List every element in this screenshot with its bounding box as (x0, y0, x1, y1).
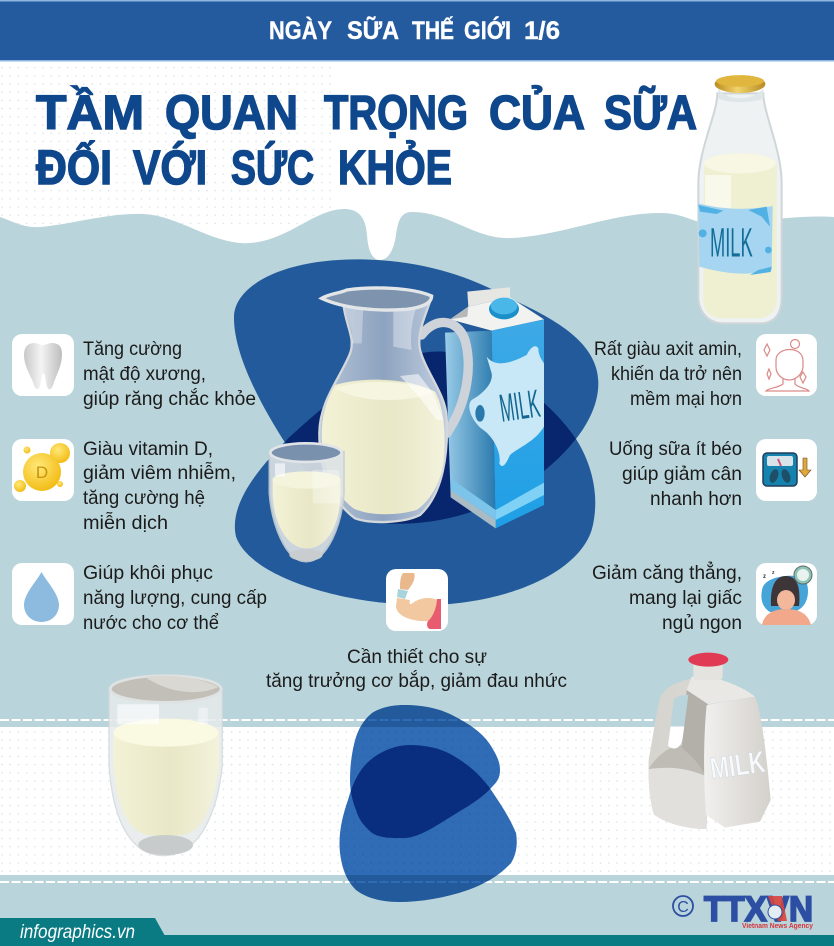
icon: flexed arm (386, 569, 448, 631)
text: miễn dịch (83, 511, 168, 534)
icon: milk carton (445, 287, 544, 528)
icon: plastic milk jug (649, 653, 771, 829)
header text: SỮA (347, 15, 399, 45)
icon: milk bottle (698, 75, 782, 323)
title: SỨC (231, 140, 314, 195)
footer (0, 918, 834, 946)
text: năng lượng, cung cấp (83, 587, 267, 609)
title: TẦM (36, 86, 144, 140)
central overlapping blobs (234, 259, 598, 605)
text (83, 338, 256, 410)
icon: large glass of milk (109, 676, 222, 856)
text: mềm mại hơn (630, 388, 742, 410)
text: tăng cường hệ (83, 487, 205, 509)
header text: GIỚI (464, 15, 511, 45)
text: Uống sữa ít béo (609, 438, 742, 460)
icon: plastic milk jug: MILK (708, 745, 767, 786)
text (83, 562, 267, 634)
benefit 4: amino acids and skin (594, 334, 817, 410)
benefit 5: weight loss (609, 438, 817, 510)
title: VỚI (133, 140, 207, 195)
header text: NGÀY (269, 16, 332, 45)
icon: milk bottle: MILK (710, 220, 753, 266)
text: Rất giàu axit amin, (594, 338, 742, 360)
text: nước cho cơ thể (83, 612, 219, 634)
title: TRỌNG (324, 87, 468, 140)
benefit 3: hydration (12, 562, 267, 634)
benefit 6: stress and sleep (592, 560, 817, 634)
icon: tooth (12, 334, 74, 396)
icon: sleeping woman (756, 563, 817, 625)
icon: vitamin D capsule: D (36, 463, 48, 482)
bottom overlapping blobs (339, 705, 517, 902)
icon: sleeping woman: z (763, 574, 766, 580)
text: giúp răng chắc khỏe (83, 387, 256, 410)
text: giúp giảm cân (622, 463, 742, 485)
text: Giảm căng thẳng, (592, 560, 742, 584)
title: CỦA (489, 85, 585, 140)
text: Cần thiết cho sự (347, 646, 487, 668)
text: khiến da trở nên (611, 363, 742, 385)
icon: scale with arrow (756, 439, 817, 501)
text: mật độ xương, (83, 363, 206, 385)
header text: THẾ (412, 16, 454, 45)
milk wave (0, 209, 834, 300)
text (592, 560, 742, 634)
title: KHỎE (338, 140, 452, 195)
text: Tăng cường (83, 338, 182, 360)
title: SỮA (604, 85, 697, 140)
text: nhanh hơn (650, 488, 742, 510)
header text: 1/6 (524, 17, 560, 45)
header text (269, 15, 560, 45)
text (83, 438, 236, 534)
text: tăng trưởng cơ bắp, giảm đau nhức (266, 669, 567, 692)
logo: TTXVN: TTXVN (704, 890, 813, 929)
benefit 1: bones and teeth (12, 334, 256, 410)
text: Giúp khôi phục (83, 562, 213, 584)
text (266, 646, 567, 692)
title: QUAN (165, 87, 298, 140)
white top area with dots (0, 61, 834, 261)
logo: TTXVN: Vietnam News Agency (742, 921, 814, 930)
icon: vitamin D capsule (12, 439, 74, 501)
icon: glass pitcher of milk (319, 288, 468, 522)
icon: woman face (756, 334, 817, 396)
icon: small glass of milk (269, 443, 344, 562)
title: ĐỐI (36, 140, 112, 195)
benefit 7: muscle growth (266, 569, 567, 692)
text: giảm viêm nhiễm, (83, 461, 236, 484)
logo: TTXVN: C (677, 899, 689, 916)
text (594, 338, 742, 410)
header bar (0, 0, 834, 62)
text: MILK (497, 382, 543, 431)
benefit 2: vitamin D (12, 438, 236, 534)
text: ngủ ngon (662, 612, 742, 634)
icon: sleeping woman: z (772, 570, 775, 576)
website text: infographics.vn (20, 922, 135, 943)
icon: water drop (12, 563, 74, 625)
text (609, 438, 742, 510)
title (36, 85, 697, 195)
white band with dots (0, 720, 834, 882)
text: mang lại giấc (629, 587, 742, 609)
text: Giàu vitamin D, (83, 438, 213, 460)
